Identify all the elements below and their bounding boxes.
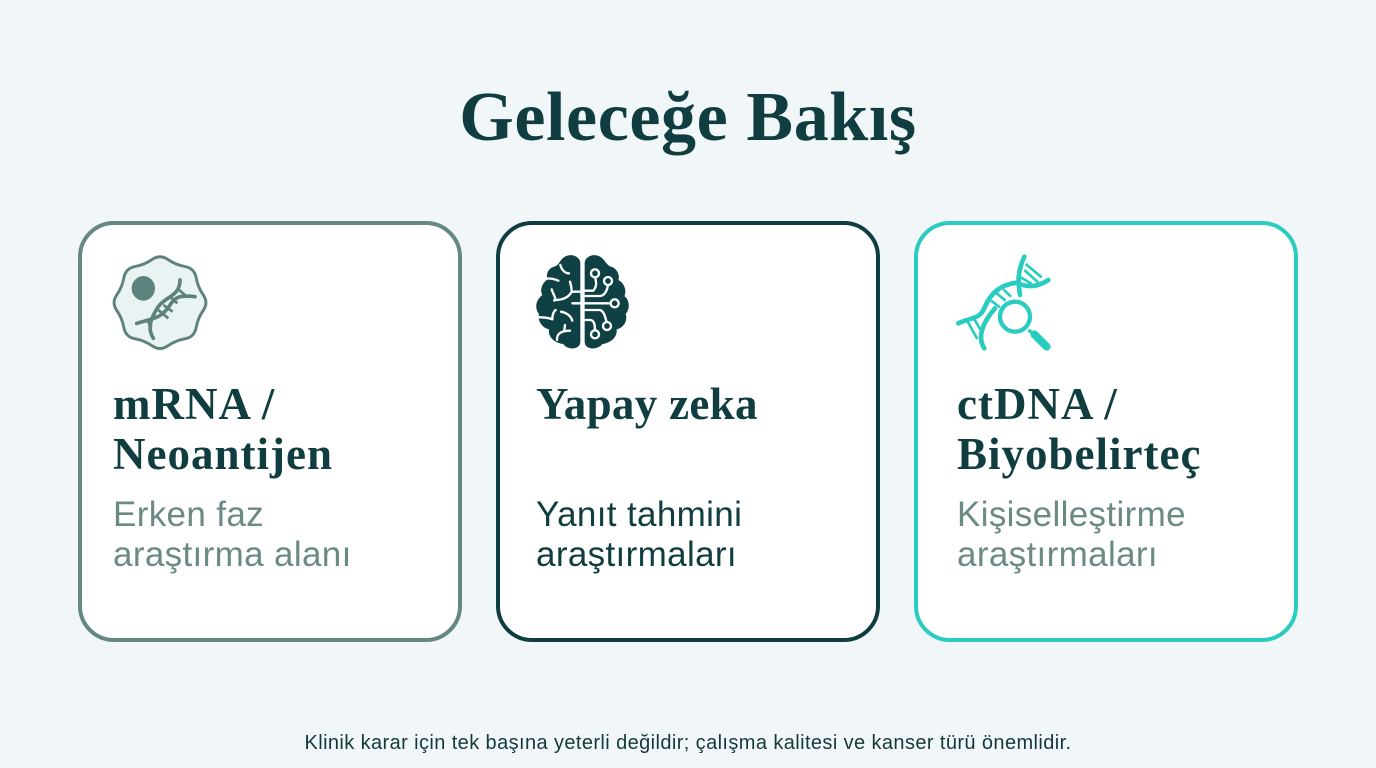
- heading: [957, 379, 1201, 479]
- panel: Yapay zeka: [496, 221, 880, 642]
- description: araştırmaları: [957, 535, 1158, 574]
- heading: [113, 379, 333, 479]
- heading: Yapay zeka: [536, 379, 758, 429]
- title: Geleceğe Bakış: [459, 79, 917, 156]
- description: Erken faz: [113, 495, 264, 534]
- description: [536, 495, 742, 574]
- footnote: Klinik karar için tek başına yeterli değildir; çalışma kalitesi ve kanser türü önemlidir.: [304, 732, 1072, 754]
- description: Yanıt tahmini: [536, 495, 742, 534]
- panel: ctDNA / Biyobelirteç: [914, 221, 1298, 642]
- icon: cell with DNA: [112, 255, 208, 350]
- heading: Neoantijen: [113, 429, 333, 479]
- panel: mRNA / Neoantijen: [78, 221, 462, 642]
- heading: ctDNA /: [957, 379, 1118, 429]
- icon: DNA with magnifier: [956, 254, 1051, 351]
- heading: mRNA /: [113, 379, 275, 429]
- icon: AI brain: [536, 255, 629, 348]
- description: [957, 495, 1186, 574]
- description: Kişiselleştirme: [957, 495, 1186, 534]
- description: araştırma alanı: [113, 535, 352, 574]
- description: [113, 495, 352, 574]
- heading: Biyobelirteç: [957, 429, 1201, 479]
- description: araştırmaları: [536, 535, 737, 574]
